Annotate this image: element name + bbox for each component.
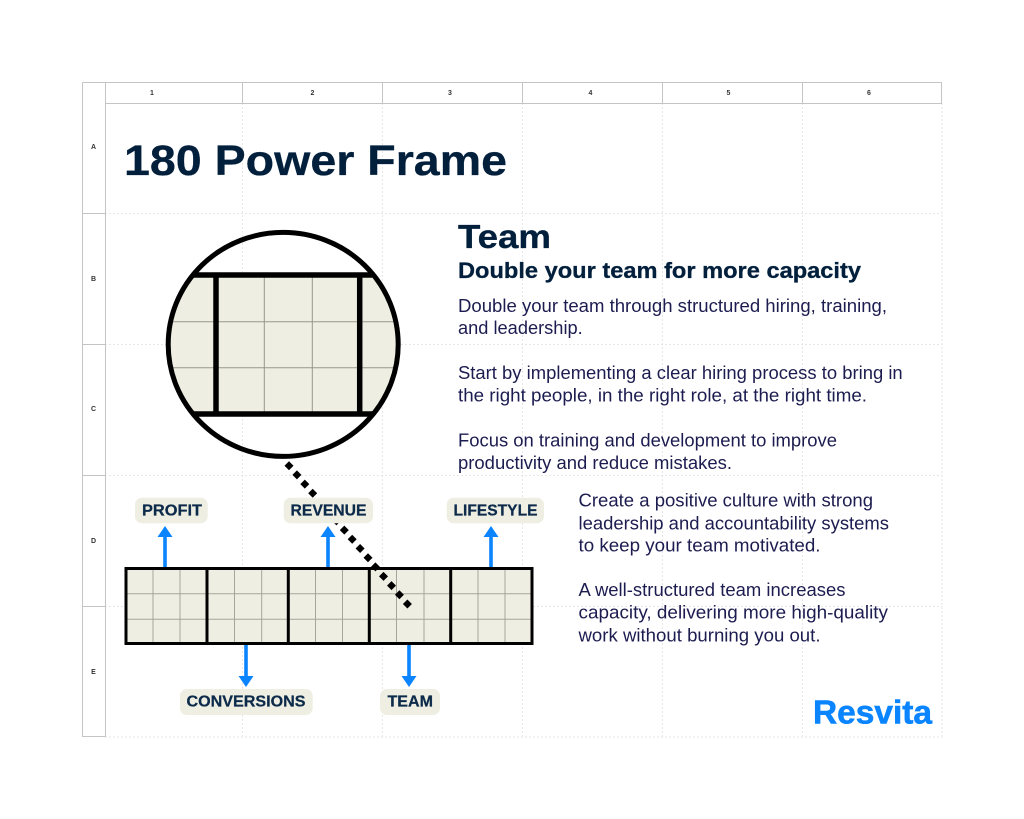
- body text: upper column: productivity and reduce mistakes.: [458, 453, 732, 473]
- label: lifestyle: [447, 498, 544, 523]
- label: team: [380, 689, 440, 715]
- reference grid frame: 3: [448, 90, 452, 97]
- body text: upper column: Start by implementing a clear hiring process to bring in: [458, 363, 903, 383]
- body text: lower column: leadership and accountability systems: [578, 514, 889, 534]
- arrow: team: [402, 645, 416, 687]
- arrow: conversions: [238, 645, 254, 687]
- label: team: TEAM: [388, 694, 433, 711]
- body text: upper column: [458, 296, 903, 473]
- label: revenue: REVENUE: [290, 503, 367, 520]
- label: profit: [135, 498, 208, 523]
- reference grid frame: D: [91, 538, 96, 545]
- magnified circle: team cell: [160, 232, 410, 456]
- body text: lower column: A well-structured team increases: [578, 580, 846, 600]
- label: conversions: CONVERSIONS: [186, 694, 306, 711]
- title: 180 Power Frame: [124, 137, 507, 185]
- body text: lower column: work without burning you out.: [577, 626, 820, 646]
- reference grid frame: 1: [150, 90, 154, 97]
- logo: Resvita: Resvita: [813, 694, 933, 730]
- body text: lower column: [577, 491, 889, 646]
- reference grid frame: [82, 82, 942, 737]
- arrow: lifestyle: [484, 526, 498, 567]
- frame bar: five cells: [125, 568, 532, 644]
- arrow: profit: [158, 526, 172, 567]
- body text: upper column: Double your team through structured hiring, training,: [458, 296, 887, 316]
- body text: lower column: to keep your team motivated.: [578, 536, 820, 556]
- subheading: Double your team for more capacity: [458, 258, 862, 283]
- body text: upper column: Focus on training and development to improve: [458, 431, 837, 451]
- reference grid frame: 2: [311, 90, 315, 97]
- body text: upper column: and leadership.: [458, 318, 583, 338]
- label: lifestyle: LIFESTYLE: [454, 503, 538, 520]
- reference grid frame: B: [91, 276, 96, 283]
- reference grid frame: 4: [589, 90, 593, 97]
- label: conversions: [180, 689, 313, 715]
- body text: lower column: capacity, delivering more high-quality: [578, 603, 888, 623]
- body text: upper column: the right people, in the right role, at the right time.: [458, 386, 867, 406]
- arrow: revenue: [320, 526, 336, 567]
- label: profit: PROFIT: [142, 503, 202, 520]
- reference grid frame: A: [91, 144, 96, 151]
- label: revenue: [284, 498, 373, 523]
- reference grid frame: C: [91, 406, 96, 413]
- body text: lower column: Create a positive culture with strong: [578, 491, 873, 511]
- reference grid frame: 5: [727, 90, 731, 97]
- reference grid frame: 6: [867, 90, 871, 97]
- heading: team: Team: [458, 218, 551, 255]
- reference grid frame: E: [91, 669, 96, 676]
- dotted connector: [284, 461, 412, 608]
